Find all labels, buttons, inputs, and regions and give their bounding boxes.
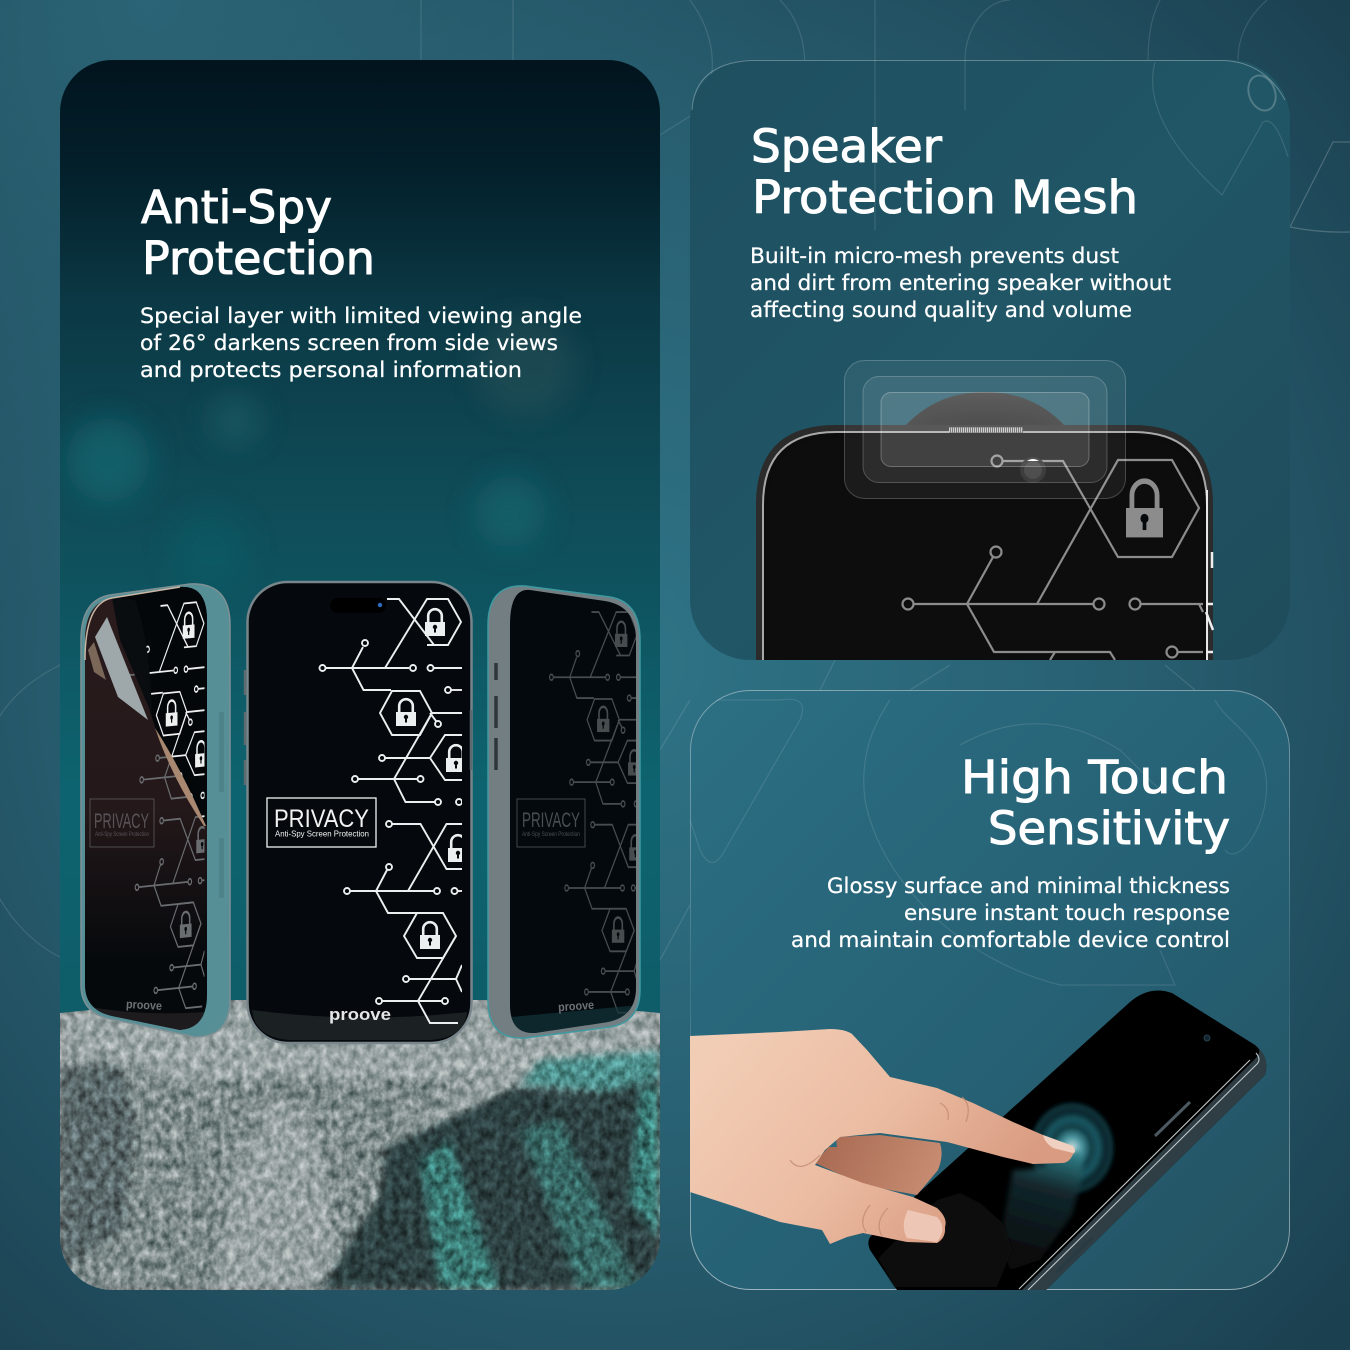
icon: lock <box>1126 481 1163 537</box>
heading: speaker protection mesh <box>751 120 1138 224</box>
curled fingers <box>815 1135 942 1195</box>
heading: anti-spy protection <box>140 188 372 275</box>
front camera <box>1020 457 1046 483</box>
phone close-up with circuit <box>756 425 1213 660</box>
text block: anti-spy description: of 26° darkens screen from side views <box>140 331 558 356</box>
panel: speaker protection mesh <box>690 60 1290 660</box>
text block: anti-spy description: Special layer with limited viewing angle <box>140 304 582 329</box>
hand <box>690 1029 1075 1244</box>
index fingernail <box>1043 1135 1075 1153</box>
phone: left, with peeling film <box>80 583 231 1038</box>
tilted phone <box>868 990 1266 1290</box>
heading: high touch sensitivity: Sensitivity <box>988 802 1230 855</box>
text block: speaker description: affecting sound quality and volume <box>750 298 1132 323</box>
heading: speaker protection mesh: Speaker <box>751 120 943 173</box>
panel: anti-spy protection <box>60 60 660 1290</box>
heading: high touch sensitivity: High Touch <box>961 751 1228 804</box>
text block: anti-spy description: and protects personal information <box>140 358 522 383</box>
palm, index finger and thumb <box>690 1029 1075 1244</box>
text block: anti-spy description <box>140 304 582 383</box>
label: privacy box, left phone <box>90 799 154 847</box>
text block: touch description: and maintain comfortable device control <box>791 928 1230 953</box>
panel edge highlight <box>692 60 1285 110</box>
label: privacy box, centre phone <box>267 798 376 847</box>
label: privacy box, right phone: PRIVACY <box>522 809 580 832</box>
heading: speaker protection mesh: Protection Mesh <box>752 171 1138 224</box>
finger shading <box>790 1097 968 1236</box>
film peel area <box>112 580 207 826</box>
heading: anti-spy protection: Protection <box>142 232 375 285</box>
panel background <box>60 60 660 1013</box>
text block: speaker description <box>750 244 1171 323</box>
label: privacy box, right phone <box>517 799 585 847</box>
panel: high touch sensitivity <box>690 690 1290 1290</box>
phone: right <box>488 586 642 1040</box>
glass layers callout <box>844 360 1126 498</box>
label: privacy box, centre phone: PRIVACY <box>274 805 369 833</box>
background outline pattern <box>0 0 1350 960</box>
phone: centre <box>245 582 472 1043</box>
label: privacy box, centre phone: Anti-Spy Screen Protection <box>275 828 369 838</box>
phone: right: proove <box>558 998 595 1014</box>
text block: touch description <box>791 874 1230 953</box>
speaker mesh <box>949 427 1023 433</box>
label: privacy box, left phone: PRIVACY <box>94 810 149 833</box>
panel inner outlines <box>875 60 1288 230</box>
label: privacy box, right phone: Anti-Spy Screen Protection <box>522 832 580 838</box>
text block: touch description: Glossy surface and minimal thickness <box>827 874 1230 899</box>
speaker dome <box>905 392 1065 426</box>
text block: speaker description: and dirt from entering speaker without <box>750 271 1171 296</box>
text block: touch description: ensure instant touch response <box>904 901 1230 926</box>
phone: left, with peeling film: proove <box>126 997 163 1013</box>
phone: centre: proove <box>329 1005 391 1024</box>
thumbnail <box>904 1210 942 1242</box>
label: privacy box, left phone: Anti-Spy Screen Protection <box>95 832 149 838</box>
heading: anti-spy protection: Anti-Spy <box>141 181 332 234</box>
heading: high touch sensitivity <box>961 751 1230 855</box>
rock base <box>60 1000 660 1290</box>
text block: speaker description: Built-in micro-mesh prevents dust <box>750 244 1119 269</box>
bokeh lights <box>64 320 570 544</box>
panel inner outlines <box>690 699 1267 985</box>
circuit lines <box>902 456 1203 660</box>
illustration: phone and hand <box>690 990 1266 1290</box>
